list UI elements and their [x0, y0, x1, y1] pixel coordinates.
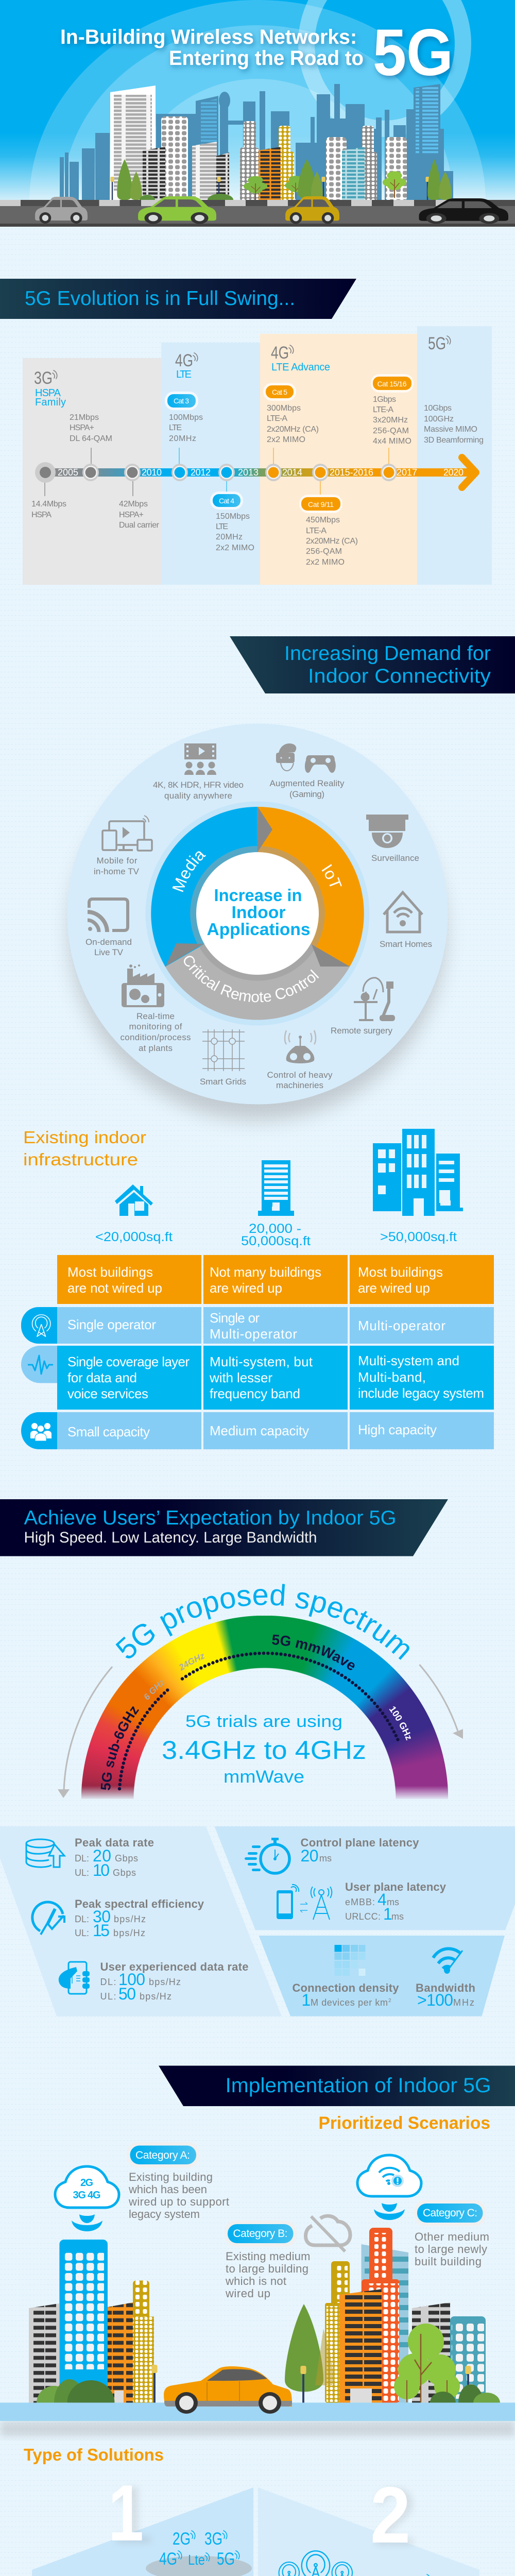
scenario: category B	[225, 2216, 350, 2300]
labels: building sizes: >50,000sq.ft	[380, 1230, 457, 1244]
generation marks: 5G	[217, 2549, 235, 2569]
inner band	[193, 849, 322, 978]
title: 5G	[373, 16, 453, 90]
timeline specs: 4G and 5G: LTE	[169, 423, 182, 432]
timeline specs: 3G: Dual carrier	[119, 521, 160, 530]
number 1: 1	[110, 2470, 154, 2560]
title: In-Building Wireless Networks:	[60, 26, 357, 48]
timeline specs: 4G and 5G: LTE	[216, 522, 228, 531]
timeline specs: 3G	[31, 413, 160, 530]
timeline specs: 4G and 5G: 4x4 MIMO	[373, 437, 411, 446]
era labels	[34, 334, 451, 408]
row: wiring status: are wired up	[358, 1280, 430, 1296]
scenario: category A: which has been	[128, 2183, 207, 2196]
metric: peak data rate: DL:	[75, 1853, 89, 1863]
metric: user plane latency: eMBB:	[345, 1897, 375, 1907]
era labels: 5G	[428, 334, 446, 353]
metric: bandwidth: MHz	[453, 1997, 474, 2008]
label: plant monitoring: condition/process	[121, 1032, 191, 1042]
icon: multi towers	[279, 2551, 352, 2576]
timeline specs: 4G and 5G: 150Mbps	[216, 512, 250, 521]
row: wiring status: are wired up	[210, 1280, 282, 1296]
trees and lamps	[110, 159, 452, 206]
heading: achieve expectation: High Speed. Low Latency. Large Bandwidth	[24, 1529, 317, 1546]
scenario: category B: to large building	[226, 2262, 308, 2275]
metric: peak data rate: Gbps	[113, 1868, 136, 1878]
panel: timeline	[23, 326, 492, 585]
row: capacity	[21, 1412, 494, 1449]
timeline specs: 4G and 5G: 2x2 MIMO	[306, 558, 345, 567]
scenario: category C: Other medium	[415, 2230, 489, 2243]
label: smart homes: Smart Homes	[380, 939, 432, 949]
era labels: LTE	[176, 369, 192, 380]
metric: user experienced rate: bps/Hz	[149, 1977, 181, 1987]
Cat pills: Cat 3	[174, 397, 189, 405]
icon: gauge	[32, 1902, 64, 1935]
panel: speed metrics	[0, 1826, 282, 2016]
metric: peak data rate: Peak data rate	[75, 1836, 154, 1849]
metric: user plane latency	[345, 1880, 447, 1923]
ground band	[0, 2403, 515, 2436]
timeline specs: 4G and 5G: 3D Beamforming	[424, 436, 484, 445]
row: operators: Multi-operator	[210, 1326, 297, 1342]
label: live TV: Live TV	[94, 947, 124, 957]
label: heavy machinery: Control of heavy	[267, 1070, 333, 1080]
metric: user experienced rate: 100	[118, 1970, 145, 1989]
foreground buildings	[110, 86, 407, 201]
heading: existing infrastructure: Existing indoor	[23, 1128, 146, 1147]
timeline specs: 3G: 42Mbps	[119, 500, 148, 509]
scenario: category A: legacy system	[129, 2208, 200, 2221]
building group C	[325, 2228, 486, 2403]
metric: connection density: M devices per km	[311, 1997, 388, 2008]
label: mobile TV: in-home TV	[94, 867, 140, 876]
scenario: category A: wired up to support	[128, 2195, 229, 2208]
heading: 5G Evolution: 5G Evolution is in Full Swing...	[25, 287, 295, 310]
heading: achieve expectation: Achieve Users’ Expectation by Indoor 5G	[24, 1507, 397, 1529]
row: coverage layers	[21, 1346, 494, 1410]
number 1: 1	[108, 2468, 144, 2557]
icon: large buildings	[373, 1129, 463, 1216]
metric: user plane latency: 1	[383, 1905, 392, 1923]
metric: connection density: Connection density	[293, 1981, 399, 1994]
spectrum arc labels: 5G mmWave	[272, 1634, 354, 1670]
labels: building sizes: 50,000sq.ft	[241, 1234, 311, 1248]
number 2: 2	[370, 2470, 410, 2560]
label: AR gaming: Augmented Reality	[270, 778, 345, 788]
heading: existing infrastructure	[23, 1128, 146, 1169]
metric: bandwidth: >100	[417, 1991, 453, 2009]
metric: user experienced rate: UL:	[100, 1991, 116, 2002]
icon: stopwatch	[245, 1838, 289, 1873]
labels: building sizes	[95, 1222, 457, 1248]
label: mobile TV: Mobile for	[97, 856, 138, 866]
generation marks: Lte	[188, 2552, 205, 2568]
row: coverage layers: frequency band	[210, 1386, 300, 1401]
wheel labels: Media	[172, 851, 206, 892]
spectrum dotted ranges	[119, 1653, 399, 1789]
scenario: category A: Category A:	[135, 2149, 190, 2161]
wheel centre text: Indoor	[232, 903, 286, 922]
segment: media	[151, 807, 258, 967]
timeline years: 2014	[282, 467, 302, 478]
icon: wifi alert cloud	[357, 2155, 421, 2220]
heading: implementation: Implementation of Indoor 5G	[226, 2074, 491, 2097]
heading: implementation	[159, 2066, 515, 2106]
icon: smart grid	[202, 1029, 245, 1071]
timeline specs: 4G and 5G: 100Mbps	[169, 413, 203, 422]
timeline specs: 4G and 5G: 3x20MHz	[373, 416, 408, 425]
metric: user plane latency: ms	[391, 1911, 404, 1922]
wheel labels: IoT	[321, 864, 342, 886]
icon: video quality	[184, 743, 216, 775]
metric: peak spectral efficiency: 15	[93, 1921, 110, 1940]
timeline specs: 4G and 5G: 300Mbps	[267, 404, 301, 413]
era labels: HSPA	[35, 387, 61, 399]
panel: indoor applications wheel	[62, 723, 453, 1128]
metric: user plane latency: 4	[377, 1890, 387, 1909]
wheel centre text	[207, 886, 310, 939]
timeline specs: 4G and 5G: 20MHz	[169, 434, 196, 443]
spectrum arc labels	[101, 1634, 411, 1790]
metric: peak spectral efficiency: 30	[93, 1907, 111, 1926]
label: smart grids: Smart Grids	[200, 1077, 246, 1087]
label: AR gaming	[270, 778, 345, 799]
metric: peak spectral efficiency: Peak spectral efficiency	[75, 1897, 204, 1910]
icon: VR and gamepad	[276, 743, 336, 773]
spectrum title: 5G proposed spectrum	[115, 1584, 409, 1660]
wheel labels	[172, 851, 342, 1003]
era labels: LTE Advance	[271, 362, 330, 373]
generation marks	[395, 2573, 445, 2576]
panel: density and bandwidth	[259, 1936, 505, 2016]
heading: 5G Evolution	[0, 279, 356, 319]
row: operators: Single operator	[67, 1317, 156, 1332]
generation marks: 4G	[159, 2549, 177, 2569]
icon: live TV cast	[88, 899, 128, 932]
metric: peak data rate: 10	[93, 1861, 110, 1879]
scenario: category C: to large newly	[415, 2243, 487, 2256]
label: live TV	[85, 937, 132, 957]
timeline specs: 4G and 5G: 2x2 MIMO	[267, 435, 305, 444]
timeline specs: 4G and 5G: LTE-A	[373, 405, 393, 414]
timeline specs: 4G and 5G: 100GHz	[424, 415, 454, 423]
Cat pills: Cat 4	[219, 497, 234, 505]
icon: mobile TV	[102, 816, 152, 851]
spectrum arc labels: 5G sub-6GHz	[101, 1706, 139, 1790]
row: coverage layers: Multi-system and	[358, 1353, 459, 1368]
skyline silhouette	[60, 84, 453, 201]
label: plant monitoring	[121, 1011, 191, 1053]
metric: control plane latency: Control plane latency	[301, 1836, 419, 1849]
icon: device grid	[335, 1945, 366, 1976]
timeline specs: 4G and 5G: 2x2 MIMO	[216, 544, 254, 552]
metric: connection density: 2	[388, 1998, 391, 2004]
spectrum arc labels: 100 GHz	[389, 1706, 411, 1740]
timeline specs: 3G: 21Mbps	[70, 413, 99, 422]
spectrum arc labels: 24GHz	[179, 1654, 205, 1671]
icon: heavy machinery	[285, 1030, 316, 1063]
metric: peak spectral efficiency	[75, 1897, 204, 1940]
wheel centre text: Increase in	[214, 886, 302, 905]
Cat pills	[165, 374, 414, 513]
car	[164, 2366, 292, 2414]
icon: phone and tower	[277, 1885, 332, 1920]
cost ellipse	[146, 2556, 252, 2576]
skyline tower windows	[416, 86, 438, 155]
generation marks: 2G	[173, 2529, 191, 2549]
generation marks	[159, 2529, 239, 2569]
era labels: 3G	[34, 368, 53, 388]
timeline years: 2020	[443, 467, 464, 478]
road	[0, 200, 515, 227]
icon: mid building	[258, 1160, 294, 1216]
solution 2	[258, 2487, 479, 2576]
label: heavy machinery: machineries	[276, 1080, 323, 1090]
timeline specs: 4G and 5G: 256-QAM	[306, 547, 342, 556]
metric: peak spectral efficiency: DL:	[75, 1914, 89, 1924]
heading: Increasing Demand: Indoor Connectivity	[308, 665, 491, 687]
hero banner	[0, 0, 515, 227]
timeline specs: 4G and 5G: Massive MIMO	[424, 425, 477, 434]
row: operators: Single or	[210, 1310, 260, 1326]
timeline specs: 4G and 5G: 1Gbps	[373, 395, 396, 404]
spectrum centre text: mmWave	[224, 1767, 304, 1787]
metric: user experienced rate: DL:	[100, 1977, 116, 1987]
title	[60, 16, 453, 90]
timeline years: 2017	[397, 467, 417, 478]
label: video quality: 4K, 8K HDR, HFR video	[153, 780, 244, 790]
timeline specs: 4G and 5G: 20MHz	[216, 533, 243, 541]
metric: user experienced rate: 50	[118, 1985, 136, 2003]
era panels	[23, 326, 492, 585]
icon: hand with phone	[59, 1962, 90, 1994]
heading: Increasing Demand	[230, 636, 515, 693]
arrows: frequency direction	[58, 1665, 463, 1798]
scenario: category B: Existing medium	[226, 2250, 310, 2263]
timeline years: 2005	[58, 467, 78, 478]
panel: latency	[214, 1826, 515, 1930]
building group A	[29, 2240, 154, 2403]
trees and lamps C	[285, 2304, 500, 2404]
scenario: category C: built building	[415, 2255, 482, 2268]
metric: control plane latency	[301, 1836, 419, 1865]
icon: database	[26, 1839, 64, 1867]
row: coverage layers: Multi-system, but	[210, 1354, 313, 1369]
timeline specs: 3G: HSPA+	[119, 511, 144, 519]
spectrum centre text	[162, 1712, 366, 1787]
row: operators: Multi-operator	[358, 1318, 445, 1333]
metric: peak data rate: Gbps	[115, 1853, 138, 1863]
timeline years: 2012	[191, 467, 211, 478]
row: coverage layers: with lesser	[209, 1370, 272, 1385]
timeline specs: 4G and 5G	[169, 395, 484, 567]
wheel centre text: Applications	[207, 920, 310, 939]
cars	[35, 196, 508, 224]
label: heavy machinery	[267, 1070, 333, 1090]
metric: control plane latency: ms	[319, 1853, 332, 1863]
rainbow arch	[81, 1616, 448, 1799]
scenario: category B: Category B:	[233, 2228, 287, 2240]
timeline arrow	[45, 457, 476, 487]
metric: peak spectral efficiency: bps/Hz	[114, 1914, 146, 1924]
timeline specs: 4G and 5G: 450Mbps	[306, 516, 340, 524]
metric: user experienced rate: User experienced data rate	[100, 1960, 248, 1973]
spectrum centre text: 3.4GHz to 4GHz	[162, 1736, 366, 1765]
scenario: category C	[357, 2155, 489, 2268]
number 2: 2	[372, 2472, 417, 2562]
metric: user experienced rate	[100, 1960, 248, 2003]
icon: legacy cloud	[55, 2166, 119, 2231]
scenario: category C: Category C:	[423, 2207, 477, 2219]
row: wiring status: are not wired up	[67, 1280, 162, 1296]
timeline specs: 4G and 5G: 256-QAM	[373, 427, 409, 435]
metric: peak spectral efficiency: bps/Hz	[113, 1928, 145, 1938]
icon: remote surgery	[354, 978, 395, 1021]
metric: connection density: 1	[302, 1991, 311, 2009]
row: coverage layers: for data and	[67, 1370, 137, 1385]
timeline specs: 4G and 5G: LTE-A	[267, 414, 287, 423]
label: video quality	[153, 780, 244, 801]
icon: legacy cloud: 3G 4G	[73, 2190, 101, 2201]
Cat pills: Cat 5	[272, 388, 287, 396]
metric: peak data rate: UL:	[75, 1868, 89, 1878]
arch base fade	[77, 1786, 453, 1800]
timeline specs: 4G and 5G: 2x20MHz (CA)	[267, 425, 319, 434]
row: capacity: Medium capacity	[210, 1423, 309, 1438]
timeline nodes	[35, 462, 397, 483]
row: wiring status	[57, 1255, 494, 1304]
row: wiring status: Not many buildings	[210, 1264, 321, 1280]
scenario: category A: Existing building	[129, 2171, 213, 2183]
icon: smart home	[384, 892, 422, 932]
metric: bandwidth	[416, 1981, 475, 2009]
timeline specs: 3G: DL 64-QAM	[70, 434, 112, 443]
timeline years: 2013	[238, 467, 259, 478]
era labels: 4G	[271, 343, 289, 363]
Cat pills: Cat 15/16	[377, 380, 407, 388]
labels: building sizes: <20,000sq.ft	[95, 1230, 173, 1244]
row: operators	[21, 1307, 494, 1344]
metric: bandwidth: Bandwidth	[416, 1981, 475, 1994]
metric: peak data rate: 20	[93, 1846, 111, 1865]
row: coverage layers: include legacy system	[358, 1385, 484, 1401]
segment arrows	[166, 807, 350, 967]
labels: building sizes: 20,000 -	[249, 1222, 301, 1236]
heading: achieve expectation	[0, 1499, 448, 1556]
label: surveillance: Surveillance	[371, 853, 419, 863]
scenario: category B: wired up	[225, 2287, 270, 2300]
label: remote surgery: Remote surgery	[331, 1026, 392, 1036]
timeline years: 2010	[142, 467, 162, 478]
Cat pills: Cat 9/11	[308, 500, 334, 509]
label: AR gaming: (Gaming)	[289, 789, 324, 799]
row: wiring status: Most buildings	[67, 1264, 153, 1280]
heading: type of solutions: Type of Solutions	[24, 2445, 164, 2464]
metric: peak data rate	[75, 1836, 154, 1879]
timeline specs: 3G: 14.4Mbps	[31, 500, 66, 509]
era labels: 4G	[175, 351, 193, 370]
timeline specs: 4G and 5G: 2x20MHz (CA)	[306, 537, 358, 546]
spectrum centre text: 5G trials are using	[185, 1712, 342, 1731]
chart: 5G spectrum arch	[58, 1584, 463, 1799]
heading: existing infrastructure: infrastructure	[23, 1150, 138, 1169]
label: video quality: quality anywhere	[164, 791, 232, 801]
heading: prioritized scenarios: Prioritized Scenarios	[318, 2113, 490, 2133]
timeline specs: 3G: HSPA	[31, 511, 52, 519]
row: capacity: High capacity	[358, 1422, 437, 1437]
metric: user plane latency: ms	[387, 1897, 399, 1907]
row: wiring status: Most buildings	[358, 1264, 443, 1280]
row: capacity: Small capacity	[67, 1424, 150, 1439]
metric: user plane latency: User plane latency	[345, 1880, 447, 1893]
row: coverage layers: Single coverage layer	[67, 1354, 190, 1369]
icon: bandwidth	[433, 1948, 462, 1974]
label: plant monitoring: Real-time	[136, 1011, 175, 1021]
title: Entering the Road to	[169, 47, 364, 70]
timeline connector lines	[45, 448, 389, 496]
metric: connection density	[293, 1981, 399, 2009]
label: mobile TV	[94, 856, 140, 876]
timeline specs: 3G: HSPA+	[70, 423, 94, 432]
panel: type of solutions hexagon	[32, 2468, 481, 2576]
panel: scenario cityscape	[0, 2228, 515, 2436]
label: live TV: On-demand	[85, 937, 132, 947]
generation marks: 3G	[204, 2529, 222, 2549]
heading: Increasing Demand: Increasing Demand for	[284, 642, 491, 665]
icon: plant monitoring	[122, 964, 164, 1007]
spectrum arc labels: 6 GHz	[144, 1680, 165, 1700]
metric: user plane latency: URLCC:	[345, 1911, 381, 1922]
segment: critical remote control	[165, 944, 350, 1020]
icon: house	[115, 1184, 153, 1216]
scenario: category A	[55, 2142, 229, 2231]
timeline years	[58, 467, 464, 478]
timeline specs: 4G and 5G: 10Gbps	[424, 404, 452, 413]
metric: control plane latency: 20	[301, 1846, 318, 1865]
segment: IoT	[258, 807, 364, 967]
row: coverage layers: Multi-band,	[358, 1369, 426, 1385]
label: plant monitoring: at plants	[139, 1043, 173, 1053]
signal domes	[29, 0, 486, 202]
row: coverage layers: voice services	[67, 1386, 148, 1401]
timeline years: 2015-2016	[330, 467, 373, 478]
metric: peak spectral efficiency: UL:	[75, 1928, 89, 1938]
panel: infrastructure table	[21, 1129, 494, 1449]
scenario: category B: which is not	[225, 2275, 286, 2287]
timeline specs: 4G and 5G: LTE-A	[306, 527, 327, 535]
solution 1	[32, 2487, 253, 2576]
icon: surveillance	[366, 815, 408, 848]
wheel labels: Critical Remote Control	[184, 956, 319, 1003]
icon: legacy cloud: 2G	[80, 2177, 93, 2189]
label: plant monitoring: monitoring of	[129, 1022, 182, 1031]
metric: user experienced rate: bps/Hz	[140, 1991, 171, 2002]
icon: no connectivity cloud	[306, 2216, 350, 2251]
bushes and lamp A	[37, 2365, 158, 2403]
era labels: Family	[35, 397, 66, 408]
